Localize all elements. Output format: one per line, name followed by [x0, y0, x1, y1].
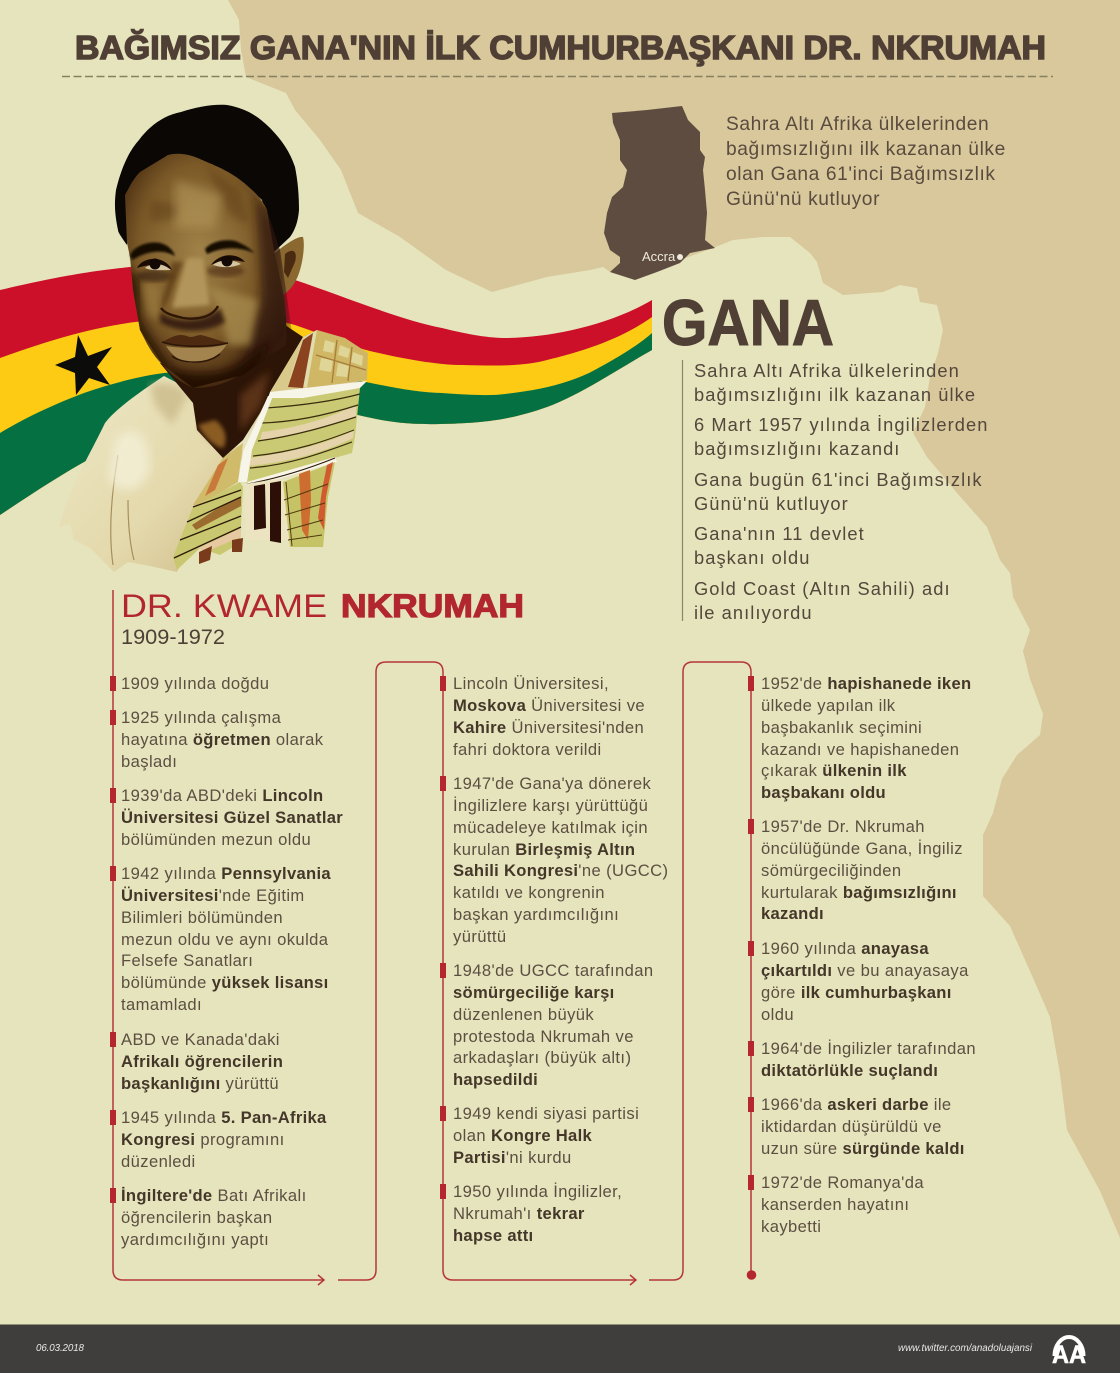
kente cloth	[173, 330, 368, 570]
timeline 1950: Nkrumah'ı tekrar	[453, 1204, 585, 1223]
timeline Afrikalı öğrenciler: başkanlığını yürüttü	[121, 1074, 279, 1093]
timeline 1949: Partisi'ni kurdu	[453, 1148, 572, 1167]
timeline 1966: 1966'da askeri darbe ile	[761, 1095, 952, 1114]
timeline 1948: düzenlenen büyük	[453, 1005, 594, 1024]
timeline 1947: 1947'de Gana'ya dönerek	[453, 774, 651, 793]
timeline 1942: Üniversitesi'nde Eğitim	[121, 886, 305, 905]
timeline 1942: Bilimleri bölümünden	[121, 908, 283, 927]
timeline 1972: kanserden hayatını	[761, 1195, 909, 1214]
timeline İngiltere: İngiltere'de Batı Afrikalı	[121, 1186, 307, 1205]
timeline 1939: 1939'da ABD'deki Lincoln	[121, 786, 323, 805]
timeline 1942: bölümünde yüksek lisansı	[121, 973, 328, 992]
Gana fact 3: Gana bugün 61'inci Bağımsızlık	[694, 469, 983, 490]
ear	[272, 237, 304, 297]
timeline connector line	[113, 590, 751, 1285]
timeline 1947: İngilizlere karşı yürüttüğü	[453, 796, 648, 815]
timeline 1947: mücadeleye katılmak için	[453, 818, 648, 837]
timeline 1942: mezun oldu ve aynı okulda	[121, 930, 328, 949]
intro text: Sahra Altı Afrika ülkelerinden	[726, 114, 989, 135]
timeline 1909: 1909 yılında doğdu	[121, 674, 269, 693]
timeline 1957	[761, 817, 963, 923]
heading: Dr. Kwame Nkrumah: DR. KWAME	[121, 588, 327, 624]
timeline 1952: başbakanlık seçimini	[761, 718, 922, 737]
timeline fahri doktora: Moskova Üniversitesi ve	[453, 696, 645, 715]
timeline fahri doktora	[453, 674, 645, 759]
Gana fact 1	[694, 360, 976, 405]
timeline 1957: 1957'de Dr. Nkrumah	[761, 817, 925, 836]
timeline 1949: olan Kongre Halk	[453, 1126, 592, 1145]
timeline 1948: hapsedildi	[453, 1070, 538, 1089]
timeline 1966	[761, 1095, 965, 1158]
nose	[172, 258, 210, 308]
left lower stripes	[173, 482, 243, 570]
title underline	[62, 76, 1053, 78]
timeline İngiltere: yardımcılığını yaptı	[121, 1230, 269, 1249]
footer link: www.twitter.com/anadoluajansi	[898, 1343, 1033, 1354]
timeline 1942: tamamladı	[121, 995, 202, 1014]
lips	[162, 335, 228, 346]
face shading	[234, 197, 292, 366]
footer bar	[0, 1324, 1120, 1373]
flag ribbon	[0, 264, 652, 515]
Gana fact 2	[694, 414, 988, 459]
timeline fahri doktora: Kahire Üniversitesi'nden	[453, 718, 644, 737]
timeline fahri doktora: fahri doktora verildi	[453, 740, 602, 759]
timeline 1952: 1952'de hapishanede iken	[761, 674, 971, 693]
timeline Afrikalı öğrenciler: Afrikalı öğrencilerin	[121, 1052, 283, 1071]
title: BAĞIMSIZ GANA'NIN İLK CUMHURBAŞKANI DR. NKRUMAH	[75, 29, 1046, 67]
intro text	[726, 114, 1006, 210]
intro text: bağımsızlığını ilk kazanan ülke	[726, 139, 1006, 160]
Gana fact 4: başkanı oldu	[694, 547, 811, 568]
timeline 1947	[453, 774, 668, 946]
timeline fahri doktora: Lincoln Üniversitesi,	[453, 674, 609, 693]
timeline 1966: uzun süre sürgünde kaldı	[761, 1139, 965, 1158]
icon: black star	[55, 335, 112, 395]
timeline 1950	[453, 1182, 622, 1245]
GANA list rule	[682, 360, 684, 621]
timeline 1960: 1960 yılında anayasa	[761, 939, 929, 958]
striped panel	[240, 388, 360, 483]
intro text: Günü'nü kutluyor	[726, 189, 880, 210]
timeline 1972: kaybetti	[761, 1217, 821, 1236]
timeline 1948: protestoda Nkrumah ve	[453, 1027, 634, 1046]
timeline end dot	[747, 1270, 756, 1280]
timeline İngiltere: öğrencilerin başkan	[121, 1208, 272, 1227]
map: Ghana	[604, 106, 715, 280]
timeline 1960: çıkartıldı ve bu anayasaya	[761, 961, 969, 980]
right lower panel	[283, 462, 335, 547]
timeline 1948	[453, 961, 654, 1089]
timeline 1949	[453, 1104, 639, 1167]
timeline Afrikalı öğrenciler	[121, 1030, 283, 1093]
vertical panels	[245, 478, 290, 540]
map: Africa landmass	[228, 0, 1120, 1238]
timeline 1925: hayatına öğretmen olarak	[121, 730, 324, 749]
timeline 1957: kurtularak bağımsızlığını	[761, 883, 957, 902]
timeline 1966: iktidardan düşürüldü ve	[761, 1117, 942, 1136]
timeline 1947: Sahili Kongresi'ne (UGCC)	[453, 861, 668, 880]
timeline 1948: arkadaşları (büyük altı)	[453, 1048, 631, 1067]
timeline 1950: 1950 yılında İngilizler,	[453, 1182, 622, 1201]
timeline 1957: öncülüğünde Gana, İngiliz	[761, 839, 963, 858]
timeline 1950: hapse attı	[453, 1226, 533, 1245]
lifespan: 1909-1972	[121, 626, 225, 649]
timeline 1957: kazandı	[761, 904, 824, 923]
Gana fact 4: Gana'nın 11 devlet	[694, 523, 865, 544]
left upper triangle	[193, 443, 243, 505]
timeline 1952	[761, 674, 971, 802]
timeline İngiltere	[121, 1186, 307, 1249]
brows and eyes	[130, 240, 254, 260]
timeline 1945: Kongresi programını	[121, 1130, 285, 1149]
plaid	[307, 330, 368, 388]
Gana fact 3: Günü'nü kutluyor	[694, 493, 849, 514]
heading: Dr. Kwame Nkrumah	[121, 588, 524, 624]
heading: GANA: GANA	[662, 286, 834, 359]
timeline 1972: 1972'de Romanya'da	[761, 1173, 924, 1192]
neck	[160, 325, 303, 458]
timeline 1960: oldu	[761, 1005, 794, 1024]
timeline 1960: göre ilk cumhurbaşkanı	[761, 983, 952, 1002]
timeline 1945: düzenledi	[121, 1152, 196, 1171]
timeline 1957: sömürgeciliğinden	[761, 861, 902, 880]
Gana fact 5	[694, 578, 951, 623]
timeline 1939: bölümünden mezun oldu	[121, 830, 311, 849]
timeline 1942	[121, 864, 331, 1014]
Gana fact 5: Gold Coast (Altın Sahili) adı	[694, 578, 951, 599]
Gana fact 5: ile anılıyordu	[694, 602, 813, 623]
timeline 1939	[121, 786, 343, 849]
intro text: olan Gana 61'inci Bağımsızlık	[726, 164, 996, 185]
timeline 1925	[121, 708, 324, 771]
timeline 1952: başbakanı oldu	[761, 783, 886, 802]
timeline 1972	[761, 1173, 924, 1236]
Gana fact 2: 6 Mart 1957 yılında İngilizlerden	[694, 414, 988, 435]
portrait of Dr. Kwame Nkrumah	[59, 105, 368, 572]
Gana fact 2: bağımsızlığını kazandı	[694, 438, 900, 459]
hair	[115, 105, 299, 252]
timeline 1960	[761, 939, 969, 1024]
timeline 1964	[761, 1039, 976, 1080]
heading: Dr. Kwame Nkrumah: NKRUMAH	[341, 588, 524, 624]
timeline markers	[110, 676, 754, 1203]
icon: AA logo: AA	[1052, 1341, 1086, 1369]
timeline 1964: 1964'de İngilizler tarafından	[761, 1039, 976, 1058]
timeline 1948: 1948'de UGCC tarafından	[453, 961, 654, 980]
timeline 1949: 1949 kendi siyasi partisi	[453, 1104, 639, 1123]
timeline Afrikalı öğrenciler: ABD ve Kanada'daki	[121, 1030, 280, 1049]
timeline 1939: Üniversitesi Güzel Sanatlar	[121, 808, 343, 827]
map: Ghana: Accra	[642, 249, 676, 264]
timeline 1952: kazandı ve hapishaneden	[761, 740, 959, 759]
timeline 1952: ülkede yapılan ilk	[761, 696, 896, 715]
timeline 1945: 1945 yılında 5. Pan-Afrika	[121, 1108, 327, 1127]
timeline 1947: katıldı ve kongrenin	[453, 883, 605, 902]
footer date: 06.03.2018	[36, 1343, 85, 1354]
timeline 1925: 1925 yılında çalışma	[121, 708, 281, 727]
robe	[59, 376, 245, 572]
timeline 1945	[121, 1108, 327, 1171]
collar stripes	[270, 330, 367, 392]
face	[125, 154, 286, 388]
Gana fact 3	[694, 469, 983, 514]
timeline 1947: başkan yardımcılığını	[453, 905, 619, 924]
timeline 1952: çıkarak ülkenin ilk	[761, 761, 907, 780]
Gana fact 1: Sahra Altı Afrika ülkelerinden	[694, 360, 960, 381]
timeline 1964: diktatörlükle suçlandı	[761, 1061, 938, 1080]
timeline 1947: kurulan Birleşmiş Altın	[453, 840, 635, 859]
timeline 1947: yürüttü	[453, 927, 507, 946]
under-eye shadows	[136, 270, 174, 282]
timeline 1942: Felsefe Sanatları	[121, 951, 253, 970]
white cuff and edges	[268, 381, 367, 398]
Gana fact 1: bağımsızlığını ilk kazanan ülke	[694, 384, 976, 405]
timeline 1942: 1942 yılında Pennsylvania	[121, 864, 331, 883]
Gana fact 4	[694, 523, 865, 568]
timeline 1948: sömürgeciliğe karşı	[453, 983, 615, 1002]
timeline 1925: başladı	[121, 752, 177, 771]
